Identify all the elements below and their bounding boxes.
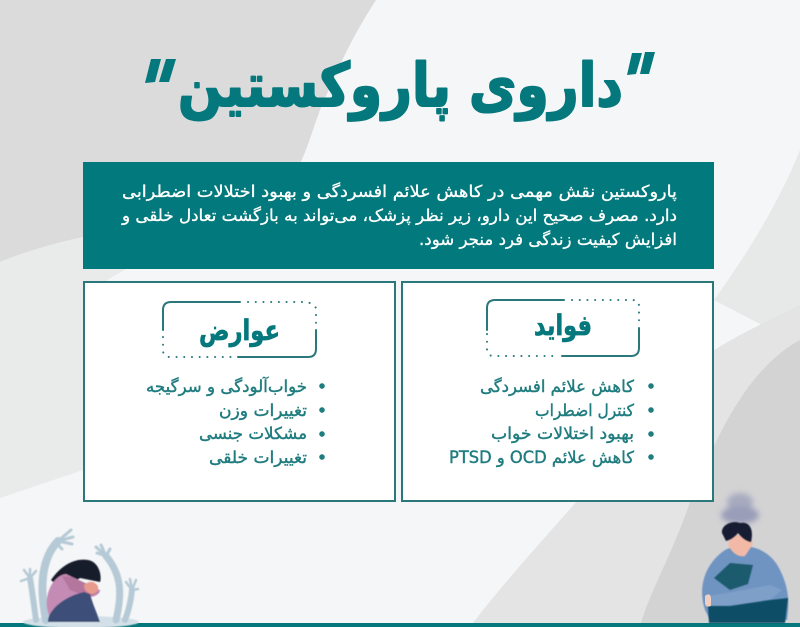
list: side effects: تغییرات وزن — [219, 401, 307, 421]
list: benefits — [449, 377, 654, 468]
heading frame: benefits — [487, 300, 639, 356]
list: benefits: بهبود اختلالات خواب — [491, 424, 634, 444]
cloud — [721, 493, 759, 524]
heading: side effects: عوارض — [199, 314, 280, 347]
heading: benefits: فواید — [534, 309, 592, 342]
bottom bar — [0, 623, 800, 627]
list: side effects: تغییرات خلقی — [209, 448, 307, 468]
illustration: woman with hands — [21, 530, 139, 627]
panel: side effects — [84, 282, 395, 501]
list: benefits: کاهش علائم افسردگی — [480, 377, 634, 397]
intro paragraph: افزایش کیفیت زندگی فرد منجر شود. — [419, 230, 677, 250]
title main text: داروی پاروکستین — [178, 51, 623, 121]
intro panel — [83, 162, 714, 269]
intro paragraph: دارد. مصرف صحیح این دارو، زیر نظر پزشک، می‌تواند به بازگشت تعادل خلقی و — [121, 206, 677, 226]
list: side effects: مشکلات جنسی — [199, 424, 307, 443]
heading frame: side effects — [163, 302, 316, 357]
list: benefits: کاهش علائم OCD و PTSD — [449, 448, 634, 468]
list: side effects — [146, 377, 325, 468]
intro paragraph: پاروکستین نقش مهمی در کاهش علائم افسردگی و بهبود اختلالات اضطرابی — [122, 182, 677, 202]
title — [145, 51, 655, 121]
illustration: sad man with cloud — [702, 493, 788, 623]
list: side effects: خواب‌آلودگی و سرگیجه — [146, 377, 307, 397]
intro paragraph — [121, 182, 677, 250]
title opening quote — [627, 52, 655, 75]
title closing quote — [145, 59, 176, 83]
list: benefits: کنترل اضطراب — [535, 401, 634, 421]
panel: benefits — [402, 282, 713, 501]
